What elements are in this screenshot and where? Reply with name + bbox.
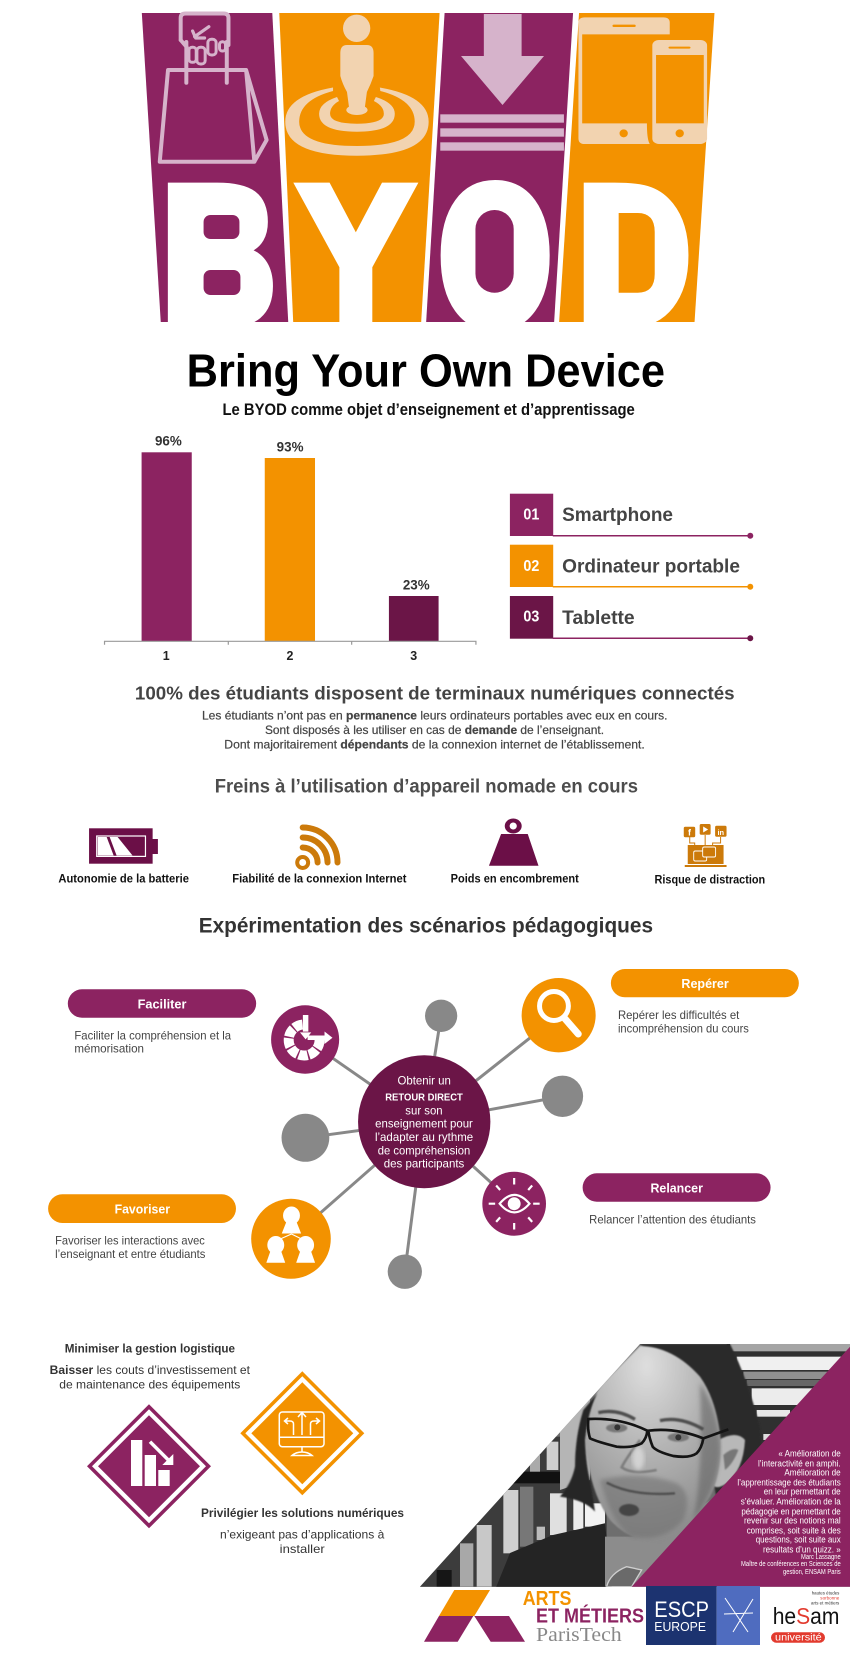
icon: person on target — [285, 15, 429, 156]
center hub: Obtenir un — [397, 1076, 451, 1088]
bar chart: 96% — [155, 433, 182, 448]
legend — [510, 494, 753, 641]
quote text: resultats d’un quizz. » — [763, 1544, 841, 1554]
logo: Arts et Métiers ParisTech: ParisTech — [536, 1624, 622, 1646]
photo background: bookshelves — [420, 1437, 607, 1590]
icon labels: Poids en encombrement — [451, 872, 579, 886]
logo: ESCP Europe — [646, 1586, 760, 1645]
heading: scenarios: Expérimentation des scénarios pédagogiques — [199, 915, 653, 938]
icon: weight — [489, 818, 538, 866]
icon labels: Risque de distraction — [655, 872, 765, 886]
legend item: tablet: 03 — [523, 609, 540, 626]
photo: mouth — [607, 1483, 675, 1494]
photo background: upper left books — [560, 1395, 590, 1490]
text block: logistics: Baisser les couts d’investissement et — [50, 1363, 251, 1377]
BYOD big letters: B — [153, 146, 284, 374]
photo: eyebrows — [598, 1411, 703, 1429]
panel: Y orange column — [279, 13, 440, 322]
hub diagram — [251, 978, 596, 1289]
callout: Favoriser: Favoriser — [115, 1202, 170, 1217]
callout: Relancer: Relancer l’attention des étudiants — [589, 1215, 756, 1227]
BYOD big letters: Y — [295, 146, 416, 374]
icon labels: Autonomie de la batterie — [58, 872, 189, 886]
icon: tablet and smartphone — [578, 17, 707, 144]
callout: Faciliter: Faciliter la compréhension et la — [74, 1030, 232, 1042]
BYOD big letters: O — [435, 146, 556, 374]
quote text: Amélioration de — [784, 1467, 841, 1477]
logo: heSam université: sorbonne — [820, 1596, 840, 1601]
callout: Favoriser: Favoriser les interactions avec — [55, 1236, 205, 1248]
icon: orange diamond monitor — [240, 1371, 364, 1495]
legend item: smartphone: 01 — [523, 506, 540, 523]
bar chart: 1 — [163, 649, 170, 663]
text block: student findings: Les étudiants n’ont pas en permanence leurs ordinateurs portables avec eux en cours. — [202, 711, 668, 723]
heading: freins: Freins à l’utilisation d’appareil nomade en cours — [215, 776, 638, 797]
center hub: sur son — [405, 1105, 443, 1117]
heading: 100%: 100% des étudiants disposent de terminaux numériques connectés — [135, 682, 735, 703]
logo: heSam université: heSam — [773, 1603, 839, 1629]
bar chart: 2 — [287, 649, 294, 663]
logo: heSam université — [771, 1591, 840, 1644]
bar chart: 93% — [277, 440, 304, 455]
quote text: revenir sur des notions mal — [744, 1515, 841, 1525]
quote text: comprises, soit suite à des — [747, 1525, 841, 1535]
panel: D orange column — [559, 13, 714, 322]
BYOD logo banner — [142, 12, 714, 322]
BYOD big letters — [168, 180, 688, 322]
icon: download arrow — [440, 14, 564, 151]
photo: Marc Lassagne portrait — [410, 1340, 850, 1590]
quote text: l’interactivité en amphi. — [758, 1458, 841, 1468]
legend item: tablet — [510, 596, 753, 641]
text block: student findings: Sont disposés à les utiliser en cas de demande de l’enseignant. — [265, 725, 604, 737]
center hub: l’adapter au rythme — [375, 1132, 473, 1144]
text block: logistics — [50, 1342, 251, 1392]
icon: eye — [482, 1172, 546, 1236]
text block: digital solutions — [201, 1506, 404, 1556]
photo: hair — [640, 1344, 762, 1500]
icon: battery — [89, 828, 158, 864]
callout: Faciliter: Faciliter — [138, 996, 186, 1011]
logo: heSam université: arts et métiers — [811, 1601, 840, 1606]
title: Bring Your Own Device — [187, 345, 665, 397]
logo: heSam université: université — [775, 1633, 822, 1644]
BYOD big letters: D — [571, 146, 695, 374]
photo: jacket — [495, 1523, 612, 1590]
callout: Favoriser — [48, 1194, 236, 1261]
callout: Favoriser: l’enseignant et entre étudiants — [55, 1249, 206, 1261]
callout: Relancer — [583, 1173, 771, 1227]
photo: left hair — [560, 1393, 597, 1512]
photo: face — [586, 1346, 721, 1543]
icon: wifi signal — [297, 828, 338, 868]
quote text — [737, 1448, 841, 1576]
callout: Repérer: incompréhension du cours — [618, 1024, 749, 1036]
center hub: de compréhension — [378, 1145, 470, 1157]
text block: digital solutions: n’exigeant pas d’applications à — [220, 1528, 385, 1542]
text block: logistics: de maintenance des équipements — [59, 1378, 240, 1392]
photo background: blinds — [727, 1343, 850, 1447]
center hub: enseignement pour — [375, 1119, 473, 1131]
icon: social distraction — [684, 824, 727, 867]
text block: student findings — [202, 711, 668, 751]
legend item: laptop: 02 — [523, 558, 539, 575]
icon: social distraction: f — [688, 827, 691, 838]
bar chart: 3 — [410, 649, 417, 663]
icon: magnifier — [522, 978, 596, 1052]
legend item: tablet: Tablette — [562, 608, 635, 629]
logo: Arts et Métiers ParisTech: ET MÉTIERS — [536, 1605, 644, 1628]
center hub: des participants — [384, 1159, 465, 1171]
bar chart: 23% — [403, 578, 430, 593]
logo: Arts et Métiers ParisTech: ARTS — [523, 1588, 571, 1610]
text block: digital solutions: installer — [280, 1542, 325, 1556]
photo: eyes — [606, 1424, 627, 1432]
callout: Repérer: Repérer — [681, 976, 729, 991]
quote text: s’évaluer. Amélioration de la — [741, 1496, 841, 1506]
photo: stubble — [600, 1476, 687, 1538]
center hub: RETOUR DIRECT — [385, 1092, 463, 1103]
callout: Faciliter — [68, 989, 256, 1056]
quote panel — [632, 1347, 850, 1587]
callout: Repérer — [611, 969, 799, 1036]
quote text: en leur permettant de — [764, 1487, 841, 1497]
photo: glasses — [588, 1419, 728, 1457]
panel: O purple column — [426, 13, 573, 322]
quote text: questions, soit suite aux — [756, 1534, 841, 1544]
bar chart — [105, 433, 476, 663]
callout: Faciliter: mémorisation — [74, 1044, 144, 1056]
photo: chin tuft — [619, 1504, 639, 1516]
photo: nose — [622, 1440, 657, 1472]
quote text: « Amélioration de — [778, 1448, 841, 1458]
icon: clock wheel — [271, 1005, 339, 1074]
text block: student findings: Dont majoritairement dépendants de la connexion internet de l’établissement. — [224, 739, 645, 751]
callout: Repérer: Repérer les difficultés et — [618, 1010, 740, 1022]
icon: people — [251, 1199, 331, 1279]
photo: right cheek shadow — [693, 1383, 720, 1520]
text block: logistics: Minimiser la gestion logistique — [65, 1342, 235, 1356]
callout: Relancer: Relancer — [650, 1180, 703, 1195]
photo: ear — [713, 1435, 745, 1487]
legend item: laptop: Ordinateur portable — [562, 557, 740, 578]
legend item: laptop — [510, 545, 753, 590]
center hub — [358, 1055, 490, 1188]
logo: Arts et Métiers ParisTech — [424, 1588, 644, 1646]
logo: heSam université: hautes études — [812, 1591, 840, 1596]
icon: purple diamond chart — [87, 1404, 211, 1528]
icon: hand holding shopping bag — [160, 14, 267, 162]
logo: ESCP Europe: EUROPE — [654, 1620, 706, 1634]
subtitle: Le BYOD comme objet d’enseignement et d’apprentissage — [222, 401, 635, 419]
panel: B purple column — [142, 13, 288, 322]
quote text: Marc Lassagne — [801, 1554, 841, 1561]
photo: tie and collar — [607, 1567, 642, 1587]
legend item: smartphone — [510, 494, 753, 539]
icon labels — [58, 872, 765, 886]
icon: social distraction: in — [717, 828, 725, 837]
legend item: smartphone: Smartphone — [562, 505, 673, 526]
photo: shirt — [605, 1500, 710, 1587]
icon labels: Fiabilité de la connexion Internet — [232, 872, 406, 886]
text block: digital solutions: Privilégier les solutions numériques — [201, 1506, 404, 1520]
logo: ESCP Europe: ESCP — [654, 1597, 709, 1622]
